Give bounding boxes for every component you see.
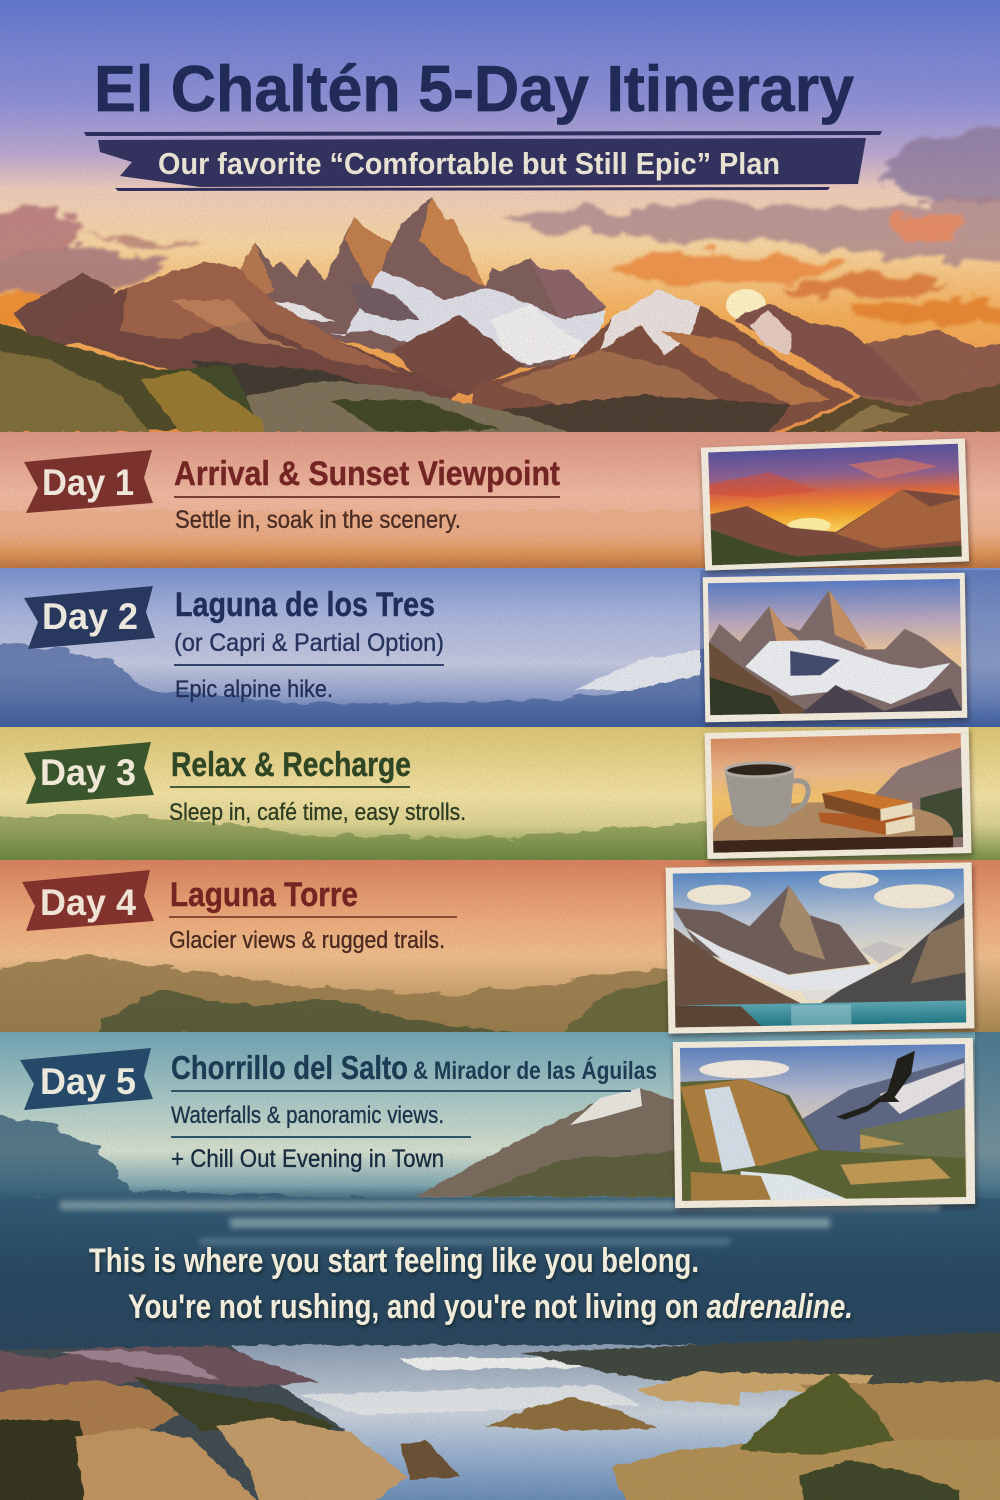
day 2 option note: (or Capri & Partial Option) <box>174 629 444 657</box>
day 4 label: Day 4 <box>40 882 136 923</box>
day 1 heading: Arrival & Sunset Viewpoint <box>174 455 560 493</box>
panel: day 5 <box>0 1032 1000 1202</box>
day 2 label: Day 2 <box>42 596 138 637</box>
day 5 description: Waterfalls & panoramic views. <box>171 1102 444 1129</box>
panel: day 4 <box>0 860 1000 1034</box>
panel: day 3 <box>0 727 1000 862</box>
photo: Laguna Torre <box>666 862 974 1034</box>
day 1 label <box>24 450 153 513</box>
day 1 label: Day 1 <box>42 462 134 503</box>
subtitle banner <box>84 131 882 191</box>
photo: coffee and books <box>705 727 971 859</box>
day 4 label <box>22 870 154 931</box>
illustration: river and rocks foreground <box>0 1330 1000 1500</box>
illustration: Fitz Roy mountain range <box>0 197 1000 437</box>
closing quote: You're not rushing, and you're not living on adrenaline. <box>128 1288 853 1326</box>
day 5 label: Day 5 <box>40 1061 136 1102</box>
day 1 description: Settle in, soak in the scenery. <box>175 506 461 534</box>
panel: day 2 <box>0 568 1000 727</box>
photo: waterfall and condor <box>673 1038 975 1208</box>
panel: lake background <box>0 1198 1000 1360</box>
photo: sunset <box>701 438 969 571</box>
day 4 description: Glacier views & rugged trails. <box>169 927 445 954</box>
day 3 description: Sleep in, café time, easy strolls. <box>169 799 466 826</box>
day 5 label <box>20 1048 153 1110</box>
panel: sky background <box>0 0 1000 440</box>
closing quote: This is where you start feeling like you belong. <box>89 1242 699 1280</box>
day 5 heading <box>171 1049 657 1086</box>
subtitle banner: Our favorite “Comfortable but Still Epic” Plan <box>158 146 780 181</box>
day 5 extra note: + Chill Out Evening in Town <box>171 1145 444 1173</box>
day 4 heading: Laguna Torre <box>170 876 358 914</box>
day 2 label <box>24 586 155 649</box>
day 2 description: Epic alpine hike. <box>175 676 333 703</box>
day 5 heading: & Mirador de las Águilas <box>413 1056 657 1085</box>
photo: Laguna de los Tres <box>703 573 967 722</box>
icon: coffee mug <box>724 762 809 828</box>
day 2 heading: Laguna de los Tres <box>175 586 435 624</box>
day 3 heading: Relax & Recharge <box>171 746 411 784</box>
day 3 label <box>24 742 154 804</box>
icon: books <box>818 788 915 836</box>
day 5 heading: Chorrillo del Salto <box>171 1049 408 1086</box>
title: El Chaltén 5-Day Itinerary <box>94 52 854 125</box>
day 3 label: Day 3 <box>40 752 136 793</box>
icon: condor <box>835 1051 916 1120</box>
panel: day 1 <box>0 432 1000 570</box>
closing quote <box>89 1242 853 1326</box>
